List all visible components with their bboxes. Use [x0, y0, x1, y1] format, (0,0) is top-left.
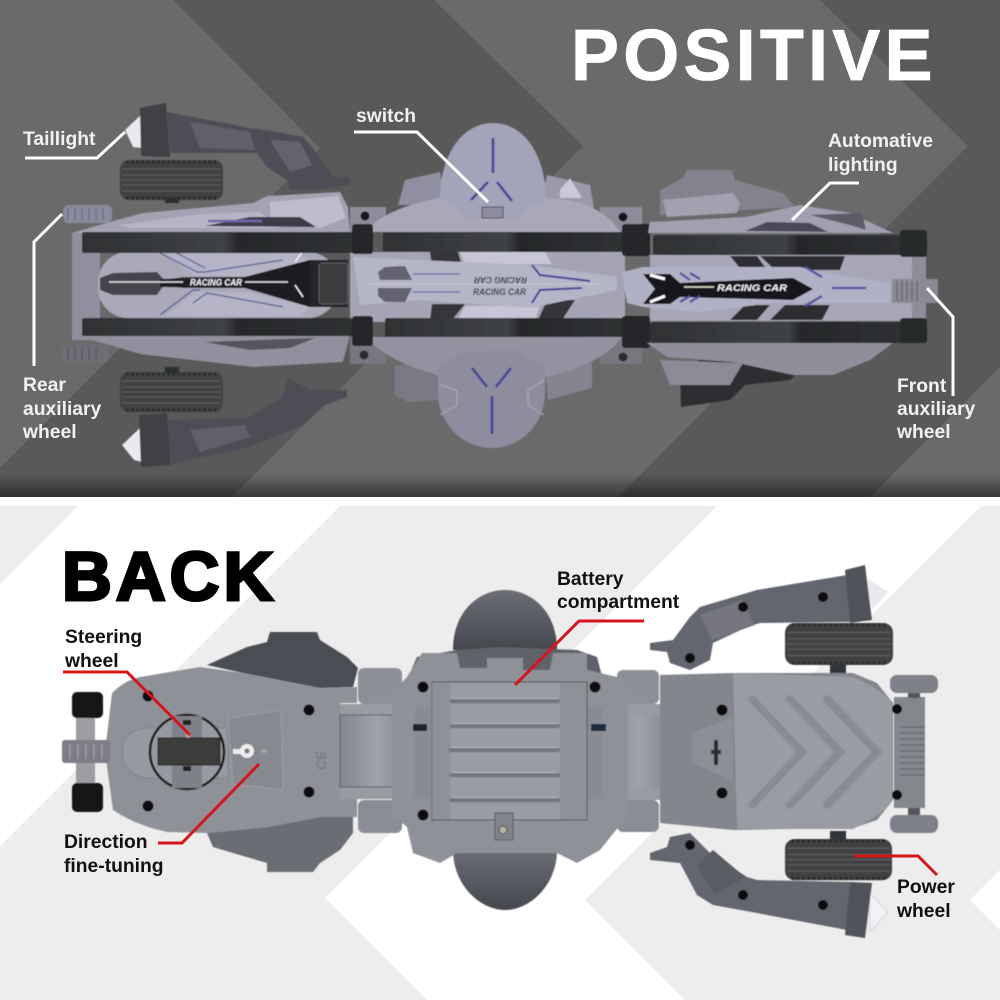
top and bottom discs: [453, 590, 557, 910]
callout: direction fine-tuning: [64, 764, 259, 877]
callout: power wheel: Power: [897, 877, 955, 898]
top dome: [660, 170, 795, 217]
key slot: [711, 740, 721, 765]
top disc with switch: [440, 123, 546, 218]
callout: front auxiliary wheel: Front: [897, 376, 947, 397]
callout: power wheel: wheel: [896, 901, 951, 922]
front auxiliary wheel: [892, 279, 938, 303]
steering wheel recess: [150, 715, 224, 789]
bottom arm: [122, 377, 347, 467]
callout: taillight: [23, 129, 125, 158]
panel: positive view: [0, 0, 1000, 497]
rear section with arms and wheels: [62, 103, 350, 467]
title: back: BACK: [62, 538, 277, 615]
callout: battery compartment: Battery: [557, 569, 624, 590]
title: positive: POSITIVE: [571, 16, 937, 96]
battery compartment cover: [432, 682, 587, 820]
rear body: [660, 673, 925, 830]
rear decal strip with racing car text: RACING CAR: [190, 278, 242, 288]
callout: rear auxiliary wheel: auxiliary: [23, 399, 102, 420]
callout: automative lighting: [792, 131, 933, 220]
rear decal strip with racing car text: [100, 248, 348, 315]
callout: rear auxiliary wheel: [22, 214, 102, 443]
callout: steering wheel: [63, 627, 190, 735]
callout: rear auxiliary wheel: wheel: [22, 422, 77, 443]
panel: back view: [0, 497, 1000, 1000]
automative lighting lens: [745, 222, 828, 232]
domes: [395, 172, 594, 402]
power wheels: [785, 623, 893, 880]
callout: switch: switch: [356, 106, 416, 127]
rear tires: [120, 160, 223, 412]
callout: front auxiliary wheel: [896, 288, 976, 443]
rear auxiliary wheels: [62, 205, 112, 362]
dark side lumps: [207, 632, 603, 872]
latch and screw: [495, 813, 513, 840]
top arm: [125, 103, 350, 190]
callout: steering wheel: wheel: [64, 651, 119, 672]
callout: power wheel: [854, 856, 955, 922]
center strip with racing car text: [353, 257, 617, 308]
bottom disc: [438, 350, 545, 448]
callout: battery compartment: compartment: [557, 592, 680, 613]
connectors with screws: [350, 207, 642, 364]
direction fine-tuning plate: [228, 710, 283, 790]
callout: switch: [354, 106, 488, 202]
rear body: [72, 192, 350, 367]
callout: battery compartment: [515, 569, 680, 685]
middle body: [350, 198, 625, 380]
rear auxiliary wheels: [890, 675, 938, 833]
front plate and body: [105, 667, 357, 833]
center strip with racing car text: RACING CAR: [474, 275, 527, 285]
callout: front auxiliary wheel: wheel: [896, 422, 951, 443]
callout: taillight: Taillight: [23, 129, 96, 150]
middle body: [392, 653, 628, 863]
callout: direction fine-tuning: fine-tuning: [64, 856, 164, 877]
front body: [647, 205, 926, 385]
CE mark: CE: [313, 751, 329, 770]
middle section: [82, 123, 650, 448]
front section: [622, 170, 938, 407]
front bars: [650, 230, 927, 343]
dark bars: [82, 224, 650, 348]
top arm: [650, 565, 888, 670]
hinges: [340, 668, 677, 833]
screw holes: [142, 592, 902, 910]
center strip with racing car text: RACING CAR: [473, 287, 526, 297]
bottom arm: [650, 833, 888, 938]
front auxiliary wheels: [62, 692, 110, 812]
callout: rear auxiliary wheel: Rear: [23, 375, 66, 396]
toy car: underside view: [62, 565, 938, 938]
toy car: top view: [62, 103, 938, 467]
callout: direction fine-tuning: Direction: [64, 832, 148, 853]
chevron ribs: [752, 699, 877, 805]
callout: front auxiliary wheel: auxiliary: [897, 399, 976, 420]
callout: steering wheel: Steering: [65, 627, 142, 648]
front strip: RACING CAR: [717, 283, 788, 293]
front strip: [622, 267, 890, 312]
callout: automative lighting: lighting: [828, 155, 898, 176]
callout: automative lighting: Automative: [828, 131, 933, 152]
bottom cap: [680, 360, 805, 407]
